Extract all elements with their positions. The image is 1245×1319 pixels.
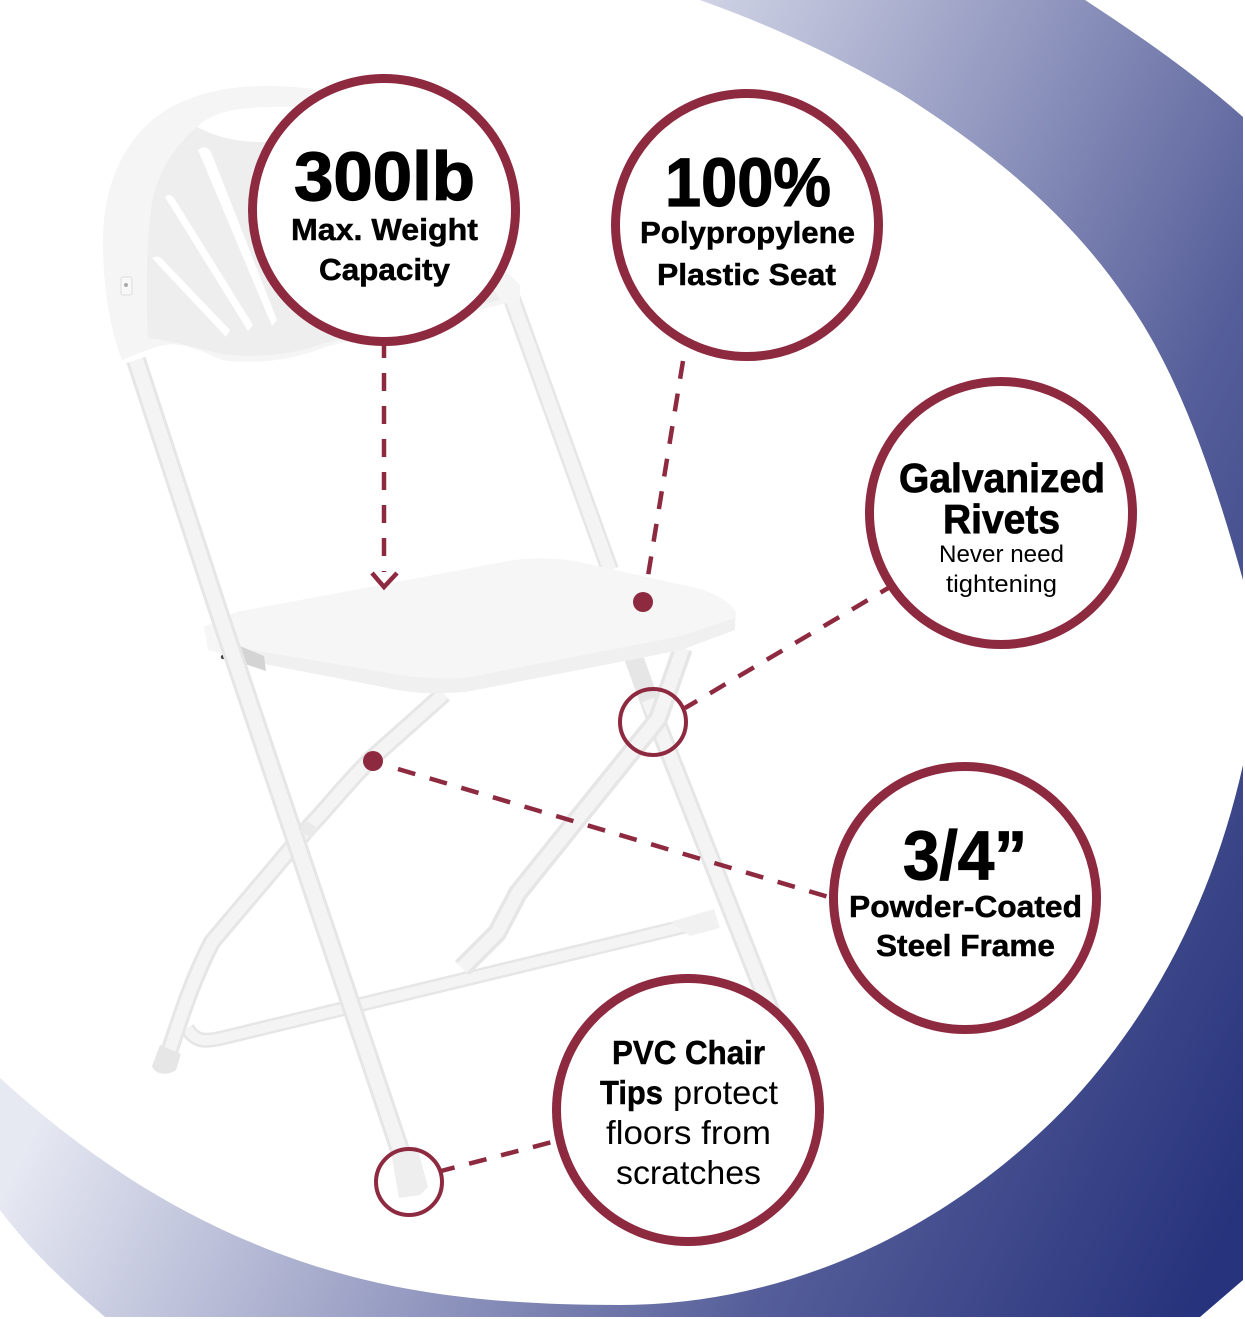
callout: PVC chair tips: floors from xyxy=(606,1114,771,1151)
callout: galvanized rivets: Galvanized xyxy=(899,455,1105,501)
callout: PVC chair tips: scratches xyxy=(616,1154,761,1191)
callout: 300lb max weight capacity: Max. Weight xyxy=(291,212,478,247)
callout: 100% polypropylene plastic seat: 100% xyxy=(665,144,831,221)
dashed leader: chair tips xyxy=(441,1141,556,1171)
chair: right cross leg xyxy=(462,648,683,968)
background gradient band: top right xyxy=(700,0,1243,580)
chair: backrest xyxy=(103,86,520,362)
marker ring: chair tip xyxy=(376,1149,442,1215)
dashed leader: steel frame xyxy=(398,769,832,898)
dashed leader: weight capacity to seat xyxy=(372,340,397,587)
marker dot: frame xyxy=(363,751,383,771)
chair: right rear upright xyxy=(511,296,800,1085)
chair: left cross leg xyxy=(152,694,444,1074)
background gradient band: bottom xyxy=(0,765,1243,1317)
callout: galvanized rivets: tightening xyxy=(946,571,1057,598)
callout: 100% polypropylene plastic seat: Polypropylene xyxy=(640,215,855,250)
callout: PVC chair tips: PVC Chair xyxy=(612,1034,765,1071)
dashed leader: galvanized rivets xyxy=(685,587,890,708)
callout: galvanized rivets: Rivets xyxy=(943,496,1060,542)
callout: galvanized rivets xyxy=(870,382,1132,644)
callout: 300lb max weight capacity: Capacity xyxy=(319,252,451,287)
chair: seat xyxy=(204,558,736,693)
callout: 100% polypropylene plastic seat: Plastic Seat xyxy=(657,257,836,292)
callout: 300lb max weight capacity: 300lb xyxy=(294,138,475,215)
callout: 3/4 inch powder-coated steel frame xyxy=(834,766,1096,1030)
callout: 300lb max weight capacity xyxy=(252,78,516,342)
arrowhead xyxy=(372,573,397,587)
chair: left main upright and foot xyxy=(136,360,428,1198)
folding chair illustration xyxy=(103,86,800,1198)
dashed leader: polypropylene seat to dot xyxy=(648,361,683,576)
callout: PVC chair tips: protect xyxy=(673,1074,778,1111)
callout: 3/4 inch powder-coated steel frame: Steel Frame xyxy=(876,928,1055,963)
callout: PVC chair tips xyxy=(556,978,820,1242)
marker ring: rivet xyxy=(620,689,686,755)
callout: 3/4 inch powder-coated steel frame: 3/4” xyxy=(903,817,1027,894)
callout: galvanized rivets: Never need xyxy=(939,541,1064,568)
marker dot: seat xyxy=(633,592,653,612)
callout: PVC chair tips: Tips xyxy=(600,1074,663,1111)
chair: bottom crossbar xyxy=(187,909,720,1040)
callout: 100% polypropylene plastic seat xyxy=(616,94,878,356)
callout: 3/4 inch powder-coated steel frame: Powder-Coated xyxy=(849,889,1082,924)
